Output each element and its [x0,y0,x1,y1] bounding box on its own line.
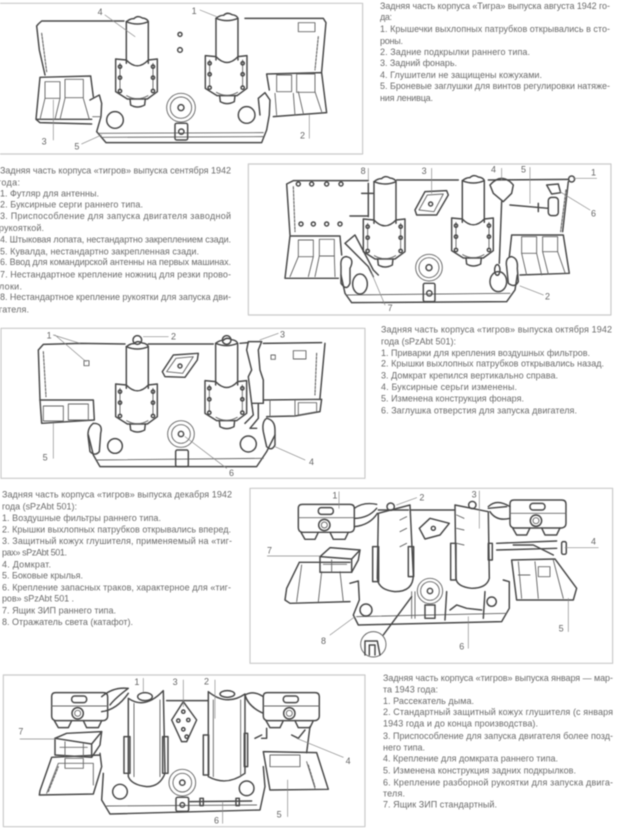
labels: December 1942 callouts: 1 [332,490,337,500]
labels: October 1942 callouts: 2 [171,331,176,341]
icon: sledgehammer [510,197,558,216]
text: August 1942 description: ния ленивца. [380,93,433,103]
text: October 1942 description: 5. Изменена конструкция фонаря. [381,394,524,404]
labels: December 1942 callouts: 4 [591,536,596,546]
icon: vertical jack [245,342,263,428]
panel: September 1942 rear hull diagram [248,164,611,315]
labels: August 1942 callouts: 1 [192,6,197,16]
inset: reflector detail [361,597,412,657]
text: December 1942 description: рах» sPzAbt 501. [2,548,67,558]
text: December 1942 description: 4. Домкрат. [2,559,51,569]
icon: left muffler guard [373,505,414,592]
labels: September 1942 callouts: 4 [491,165,496,175]
text: September 1942 description: 4. Штыковая лопата, нестандартно закреплением сзади. [0,234,231,244]
icon: tool box [55,732,102,757]
text: September 1942 description: 6. Ввод для командирской антенны на первых машинах. [0,257,231,267]
text: December 1942 description: 8. Отражатель света (катафот). [2,617,133,627]
labels: October 1942 callouts [43,329,314,478]
icon: jack brackets [255,730,305,738]
icon: shovel [490,178,513,275]
text: January-March 1943 description: 1. Рассекатель дыма. [383,696,474,706]
panel: December 1942 rear hull diagram [250,488,613,663]
labels: September 1942 callouts: 5 [521,165,526,175]
icon: starter fitting plate [172,702,197,742]
text: January-March 1943 description: теля. [383,789,405,799]
labels: August 1942 callouts [42,6,309,151]
text: October 1942 description: 6. Заглушка отверстия для запуска двигателя. [381,405,577,415]
text: August 1942 description: Задняя часть корпуса «Тигра» выпуска августа 1942 го- [380,1,610,11]
text: September 1942 description: 8. Нестандартное крепление рукоятки для запуска дви- [0,292,231,302]
labels: December 1942 callouts: 5 [559,624,564,634]
text: August 1942 description: да: [380,12,392,22]
icon: dismantled starter handle [190,798,252,806]
labels: August 1942 callouts: 4 [98,7,103,17]
labels: January-March 1943 callouts: 3 [173,677,178,687]
icon: right air filter [510,500,566,535]
icon: left air filter [298,504,354,539]
text: September 1942 description: 3. Приспособление для запуска двигателя заводной [0,211,231,221]
labels: January-March 1943 callouts: 4 [346,756,351,766]
labels: September 1942 callouts: 1 [591,167,596,177]
icon: left muffler guard [124,691,168,787]
text: December 1942 description: 3. Защитный кожух глушителя, применяемый на «тиг- [2,536,232,546]
text: December 1942 description: года (sPzAbt 501): [2,501,77,511]
text: October 1942 description: 1. Приварки для крепления воздушных фильтров. [381,348,590,358]
labels: September 1942 callouts: 2 [545,291,550,301]
labels: September 1942 callouts [361,165,597,313]
text: October 1942 description: года (sPzAbt 501): [381,336,456,346]
labels: January-March 1943 callouts: 5 [277,809,282,819]
labels: August 1942 callouts: 3 [42,136,47,146]
icon: antenna case [569,176,575,182]
labels: October 1942 callouts: 5 [43,453,48,463]
text: January-March 1943 description: 1943 года и до конца производства). [383,719,538,729]
text: December 1942 description: 5. Боковые крылья. [2,571,83,581]
text: October 1942 description [381,325,612,415]
text: September 1942 description: 7. Нестандартное крепление ножниц для резки прово- [0,269,231,279]
text: January-March 1943 description: 4. Крепление для домкрата раннего типа. [383,754,558,764]
icon: right muffler guard [451,505,492,588]
text: January-March 1943 description: него типа. [383,743,425,753]
text: December 1942 description: 2. Крышки выхлопных патрубков открывались вперед. [2,525,231,535]
labels: December 1942 callouts [267,490,598,651]
text: December 1942 description: Задняя часть корпуса «тигров» выпуска декабря 1942 [2,490,232,500]
labels: August 1942 callouts: 5 [74,141,79,151]
labels: October 1942 callouts: 1 [47,330,52,340]
text: October 1942 description: 2. Крышки выхлопных патрубков открывались назад. [381,359,604,369]
labels: January-March 1943 callouts: 7 [18,726,23,736]
text: August 1942 description: 1. Крышечки выхлопных патрубков открывались в сто- [380,24,610,34]
icon: wire cutters [345,235,378,277]
text: December 1942 description: 1. Воздушные фильтры раннего типа. [2,513,161,523]
icon: left tool box [320,548,360,572]
text: August 1942 description [380,1,610,103]
icon: right muffler guard [203,692,248,781]
labels: January-March 1943 callouts [18,676,351,825]
labels: September 1942 callouts: 6 [591,209,596,219]
labels: September 1942 callouts: 8 [361,166,366,176]
text: September 1942 description: Задняя часть корпуса «тигров» выпуска сентября 1942 [0,165,231,175]
text: September 1942 description: 1. Футляр для антенны. [0,189,99,199]
text: September 1942 description [0,165,231,315]
text: October 1942 description: 4. Буксирные серьги изменены. [381,382,517,392]
text: December 1942 description [2,490,232,627]
text: January-March 1943 description: 7. Ящик ЗИП стандартный. [383,800,497,810]
icon: left air filter [52,693,108,728]
labels: December 1942 callouts: 8 [321,636,326,646]
labels: August 1942 callouts: 2 [300,130,305,140]
icon: starter crank [350,183,373,217]
text: September 1942 description: 5. Кувалда, нестандартно закрепленная сзади. [0,246,199,256]
text: September 1942 description: 2. Буксирные серги раннего типа. [0,200,143,210]
labels: September 1942 callouts: 3 [422,166,427,176]
panel: October 1942 rear hull diagram [1,328,365,478]
text: January-March 1943 description: 2. Стандартный защитный кожух глушителя (с января [383,707,613,717]
text: December 1942 description: ров» sPzAbt 501 . [2,594,74,604]
labels: December 1942 callouts: 7 [267,546,272,556]
text: August 1942 description: 4. Глушители не защищены кожухами. [380,70,542,80]
labels: October 1942 callouts: 3 [280,329,285,339]
labels: December 1942 callouts: 6 [459,641,464,651]
text: August 1942 description: 2. Задние подкрылки раннего типа. [380,47,530,57]
text: October 1942 description: Задняя часть корпуса «тигров» выпуска октября 1942 [381,325,612,335]
text: January-March 1943 description: та 1943 года: [383,684,438,694]
panel: January-March 1943 rear hull diagram [3,675,365,827]
labels: January-March 1943 callouts: 6 [214,815,219,825]
icon: right air filter [263,693,319,728]
text: October 1942 description: 3. Домкрат крепился вертикально справа. [381,370,558,380]
text: January-March 1943 description: 5. Изменена конструкция задних подкрылков. [383,765,576,775]
labels: January-March 1943 callouts: 2 [204,676,209,686]
text: January-March 1943 description [383,673,613,810]
labels: December 1942 callouts: 2 [419,493,424,503]
labels: December 1942 callouts: 3 [472,490,477,500]
text: August 1942 description: роны. [380,36,403,46]
labels: January-March 1943 callouts: 1 [134,677,139,687]
labels: September 1942 callouts: 7 [388,303,393,313]
icon: jack [497,541,566,555]
text: January-March 1943 description: Задняя часть корпуса «тигров» выпуска января — мар- [383,673,613,683]
text: August 1942 description: 3. Задний фонарь. [380,58,457,68]
text: December 1942 description: 6. Крепление запасных траков, характерное для «тиг- [2,582,231,592]
panel: August 1942 rear hull diagram [0,3,363,154]
text: September 1942 description: рукояткой. [0,223,44,233]
labels: October 1942 callouts: 4 [309,457,314,467]
text: January-March 1943 description: 3. Приспособление для запуска двигателя более позд- [383,731,613,741]
labels: October 1942 callouts: 6 [229,468,234,478]
text: January-March 1943 description: 6. Крепление разборной рукоятки для запуска двига- [383,778,613,788]
text: December 1942 description: 7. Ящик ЗИП раннего типа. [2,605,116,615]
text: August 1942 description: 5. Броневые заглушки для винтов регулировки натяже- [380,81,610,91]
icon: command antenna mount [547,184,561,194]
